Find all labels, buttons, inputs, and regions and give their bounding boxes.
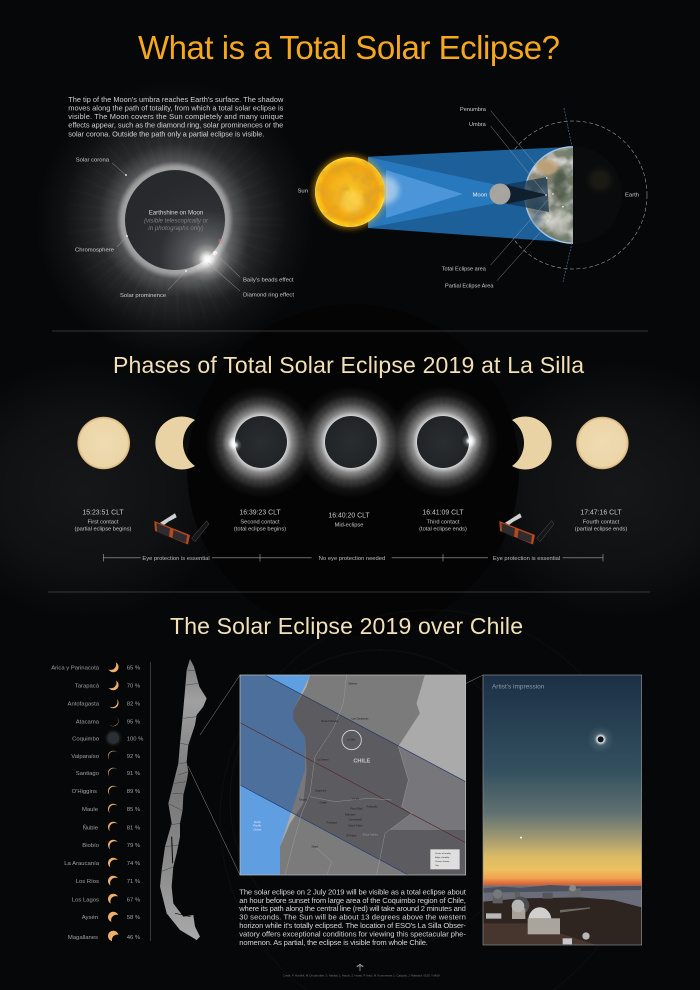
icon: eclipse glasses left — [154, 513, 209, 544]
totality path map: Pacific — [253, 824, 262, 828]
time: fourth contact — [575, 509, 627, 533]
label: baily's beads: Baily's beads effect — [243, 278, 294, 284]
path of totality — [240, 675, 466, 874]
icon: earth — [524, 146, 612, 244]
intro text block: effects appear, such as the diamond ring, solar prominences or the — [68, 121, 283, 130]
light beams — [368, 147, 573, 243]
total eclipse illustration — [59, 104, 291, 336]
description text block: The solar eclipse on 2 July 2019 will be visible as a total eclipse about — [239, 888, 467, 897]
label: baily's beads — [215, 253, 294, 284]
map legend: Edge of totality — [435, 856, 450, 859]
time: first contact: First contact — [88, 519, 119, 525]
totality path map: CHILE — [353, 759, 371, 765]
time: first contact — [75, 509, 132, 533]
time: third contact: (total eclipse ends) — [419, 527, 467, 533]
description text block: 30 seconds. The Sun will be about 13 degrees above the western — [239, 913, 466, 922]
label: partial eclipse area — [445, 206, 564, 290]
la silla circle — [342, 730, 361, 750]
description text block: nomenon. As partial, the eclipse is visible from whole Chile. — [239, 938, 428, 947]
description text block — [238, 888, 467, 947]
regional magnitude list: 92 % — [127, 754, 141, 760]
regional magnitude list: 67 % — [127, 898, 141, 904]
regional magnitude list: Aysén — [82, 915, 98, 921]
description text block: horizon while it's totally eclipsed. The location of ESO's La Silla Obser- — [239, 921, 466, 930]
regional magnitude list: Antofagasta — [68, 702, 100, 708]
phase times — [75, 509, 627, 533]
totality path map — [240, 674, 466, 876]
label: solar prominence — [120, 270, 187, 299]
label: solar corona — [76, 157, 127, 176]
intro text block: The tip of the Moon's umbra reaches Earth's surface. The shadow — [68, 95, 284, 104]
label: solar corona: Solar corona — [76, 157, 110, 163]
map labels: Paihuano — [345, 814, 356, 817]
map labels — [299, 683, 378, 848]
regional magnitude list: 70 % — [127, 683, 141, 689]
regional magnitude list: Biobío — [82, 843, 100, 849]
regional magnitude list: Valparaíso — [71, 754, 100, 760]
regional magnitude list: 71 % — [127, 879, 141, 885]
regional magnitude list: Atacama — [76, 719, 100, 725]
label: chromosphere — [75, 235, 128, 254]
title: What is a Total Solar Eclipse? — [138, 29, 560, 66]
eye protection timeline: No eye protection needed — [319, 556, 385, 562]
time: second contact: (total eclipse begins) — [234, 527, 286, 533]
moon shadow: penumbra and umbra — [503, 177, 549, 212]
map labels: Andacollo — [367, 805, 378, 808]
regional magnitude list: 100 % — [127, 736, 144, 742]
phase: third contact — [387, 386, 499, 498]
intro text block — [68, 95, 284, 138]
heading: phases: Phases of Total Solar Eclipse 2019 at La Silla — [113, 352, 584, 378]
regional magnitude list: 91 % — [127, 771, 141, 777]
map labels: Punta Colorada — [321, 720, 339, 723]
totality path map: South — [254, 820, 261, 824]
regional magnitude list: O'Higgins — [72, 789, 97, 795]
regional magnitude list: 95 % — [127, 719, 141, 725]
regional magnitude list: 65 % — [127, 665, 141, 671]
icon: moon — [490, 184, 510, 204]
horizon haze — [483, 886, 642, 909]
map labels: Coquimbo — [315, 790, 327, 793]
crescent icons — [104, 659, 123, 945]
intro text block: visible. The Moon covers the Sun completely and many unique — [68, 112, 283, 121]
map labels: El Palqui — [347, 835, 357, 838]
time: mid-eclipse: Mid-eclipse — [335, 523, 363, 529]
regional magnitude list: Tarapacá — [75, 683, 100, 689]
map labels: Illapel — [312, 845, 319, 848]
map labels: Ovalle — [320, 802, 327, 805]
map labels: Las Campanas — [352, 718, 369, 721]
earth label: Earth — [625, 192, 639, 198]
phase: fourth contact sun — [576, 417, 629, 469]
phase: partial crescent before totality — [155, 417, 195, 470]
map labels: Monte Patria — [348, 824, 363, 827]
regional magnitude list: 79 % — [127, 843, 141, 849]
intro text block: solar corona. Outside the path only a partial eclipse is visible. — [68, 130, 264, 138]
eye protection timeline: Eye protection is essential — [493, 556, 560, 562]
label: diamond ring — [208, 263, 294, 298]
time: third contact — [419, 509, 467, 533]
credit line: Credit: P. Horálek, M. Druckmüller, S. Habbal, L. Hauck, Z. Horák, P. Aniol, M. Kornmesser, L. Calçada, J. Rabaduz / ESO / NASA — [283, 974, 440, 978]
map labels: Tongoy — [299, 799, 308, 802]
moon label: Moon — [472, 192, 487, 198]
eclipse phases row — [77, 386, 629, 498]
earthshine label: Earthshine on Moon — [149, 209, 203, 216]
label: total eclipse area: Total Eclipse area — [442, 266, 487, 272]
eye protection timeline: Eye protection is essential — [142, 556, 210, 562]
regional magnitude list: 85 % — [127, 807, 141, 813]
label: umbra — [469, 122, 547, 196]
regional magnitude list: Arica y Parinacota — [51, 665, 100, 671]
sky — [483, 675, 642, 887]
regional magnitude list: Ñuble — [83, 824, 99, 831]
map labels: Punitaqui — [327, 822, 337, 825]
description text block: vatory offers exceptional conditions for viewing this spectacular phe- — [239, 930, 466, 938]
earthshine label: in photographs only) — [148, 225, 204, 232]
land: chile — [280, 675, 425, 875]
description text block: an hour before sunset from large area of the Coquimbo region of Chile, — [239, 896, 466, 905]
icon: eso logo — [356, 964, 364, 971]
map of Chile — [160, 659, 207, 940]
phase: partial crescent after totality — [512, 417, 552, 470]
label: total eclipse area — [442, 193, 554, 272]
earthshine label: (visible telescopically or — [144, 218, 209, 225]
eclipse feature callouts — [75, 157, 294, 299]
time: mid-eclipse — [328, 513, 370, 529]
regional magnitude list: 46 % — [127, 935, 141, 941]
label: diamond ring: Diamond ring effect — [243, 292, 294, 298]
regional magnitude list: 82 % — [127, 702, 141, 708]
time: first contact: 15:23:51 CLT — [82, 509, 124, 516]
map labels: La Silla — [347, 739, 356, 742]
time: fourth contact: (partial eclipse ends) — [575, 527, 627, 533]
sun-moon-earth diagram — [298, 107, 647, 290]
totality path map: Elqui Valley — [363, 833, 379, 837]
label: penumbra — [460, 107, 548, 179]
phase: mid-eclipse — [295, 386, 407, 498]
icon: sun — [313, 155, 399, 229]
borders and roads — [285, 675, 425, 875]
regional magnitude list: 81 % — [127, 825, 141, 831]
artist's impression photo — [483, 675, 642, 945]
map labels: Combarbalá — [348, 819, 362, 822]
map labels: La Serena — [317, 758, 329, 761]
venus — [520, 837, 522, 839]
label: partial eclipse area: Partial Eclipse Area — [445, 284, 494, 290]
time: second contact: Second contact — [240, 519, 280, 525]
sun label: Sun — [298, 188, 308, 194]
time: fourth contact: 17:47:16 CLT — [580, 509, 622, 516]
earthshine label — [144, 209, 209, 232]
ground — [483, 897, 642, 945]
time: fourth contact: Fourth contact — [583, 519, 620, 525]
regional magnitude list: Los Ríos — [76, 879, 99, 885]
connector lines to map — [188, 675, 483, 875]
map legend — [430, 849, 460, 869]
eye protection timeline — [103, 554, 603, 562]
time: mid-eclipse: 16:40:20 CLT — [328, 513, 370, 520]
map legend: Chosen history — [435, 860, 450, 863]
label: chromosphere: Chromosphere — [75, 248, 115, 254]
dashed moon orbit — [499, 121, 647, 269]
label: penumbra: Penumbra — [460, 107, 487, 113]
icon: eclipse glasses right — [499, 513, 554, 544]
map labels: Vicuña — [352, 798, 360, 801]
time: third contact: Third contact — [427, 519, 460, 525]
regional magnitude list: Coquimbo — [72, 736, 100, 742]
regional magnitude list: Los Lagos — [72, 898, 99, 904]
regional magnitude list: Santiago — [76, 771, 100, 777]
limit and centre lines — [240, 675, 466, 875]
land: argentina — [280, 675, 466, 846]
time: third contact: 16:41:09 CLT — [422, 509, 464, 516]
regional magnitude list: La Araucanía — [64, 861, 100, 867]
ocean — [240, 675, 310, 875]
heading: chile: The Solar Eclipse 2019 over Chile — [170, 613, 523, 639]
regional magnitude list: 58 % — [127, 915, 141, 921]
terminator line — [563, 108, 572, 282]
phase: first contact sun — [77, 417, 130, 469]
time: second contact: 16:39:23 CLT — [239, 509, 281, 516]
label: umbra: Umbra — [469, 122, 487, 128]
regional magnitude list: 89 % — [127, 789, 141, 795]
map legend: City — [435, 864, 440, 867]
description text block: where its path along the central line (red) will take around 2 minutes and — [238, 904, 466, 913]
regional magnitude list — [51, 659, 150, 945]
phase: second contact — [205, 386, 317, 498]
time: first contact: (partial eclipse begins) — [75, 527, 132, 533]
intro text block: moves along the path of totality, from which a total solar eclipse is — [68, 104, 284, 112]
map labels: Pisco Elqui — [350, 807, 363, 810]
caption: Artist's impression — [492, 684, 545, 691]
time: second contact — [234, 509, 286, 533]
regional magnitude list: Magallanes — [68, 935, 98, 941]
regional magnitude list: Maule — [82, 807, 99, 813]
domes — [486, 885, 590, 944]
regional magnitude list: 74 % — [127, 861, 141, 867]
map labels: Vallenar — [348, 683, 357, 686]
label: solar prominence: Solar prominence — [120, 293, 167, 299]
totality path map: Ocean — [253, 828, 262, 832]
eclipse in sky — [587, 726, 614, 753]
map legend: Centre of totality — [435, 852, 452, 855]
